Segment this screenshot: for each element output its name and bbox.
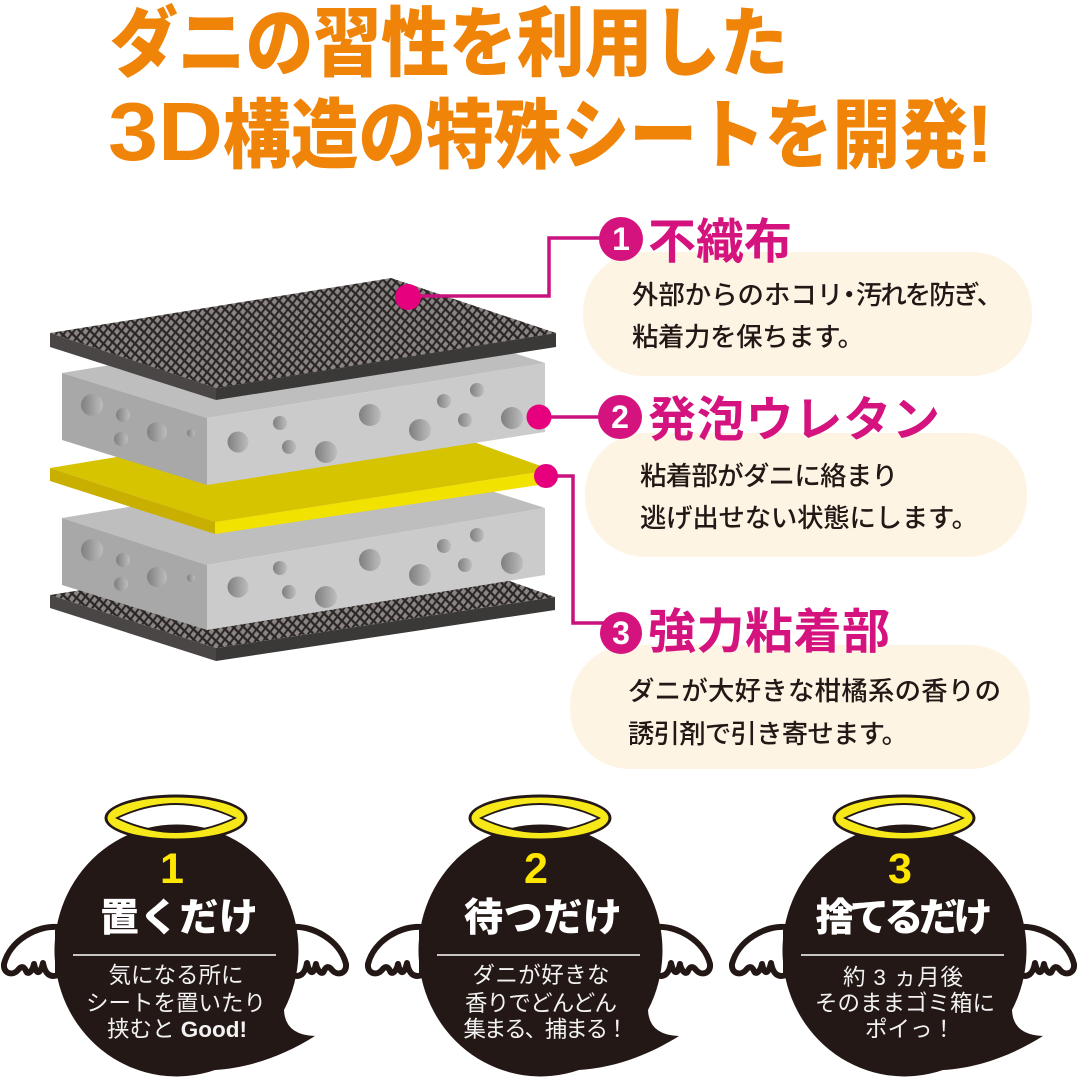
description [73,955,276,1042]
wings [732,927,1074,976]
number badge 3 [600,612,642,654]
title: ダニの習性を利用した [110,2,788,87]
description [437,955,640,1042]
layer: top non-woven sheet [50,278,556,400]
body text 1: 外部からのホコリ [632,280,843,310]
pill 1 [583,252,1032,376]
body text 2: 粘着部がダニに絡まり [640,461,898,491]
pill 3 [570,645,1030,769]
description: 気になる所に [108,963,244,988]
number badge 1 [599,217,643,261]
number: 2 [524,845,548,893]
title: 3D [108,85,223,178]
heading 2: 発泡ウレタン [648,394,940,447]
marker dot 3 [534,464,558,488]
step 1: angel character [4,794,346,1076]
step 2: angel character [368,794,710,1076]
callout 3: strong adhesive [534,464,1030,769]
number badge 2 [598,395,642,439]
number badge 1: 1 [612,221,630,257]
number: 3 [888,845,912,893]
body [782,824,1043,1076]
callout 2: urethane foam [526,394,1027,557]
body text 1: 汚れを防ぎ、 [856,280,1003,310]
body [54,824,315,1076]
body text 3: ダニが大好きな柑橘系の香りの [628,676,1001,706]
body text 3 [628,676,1001,749]
marker dot 2 [526,404,552,430]
description: ダニが好きな [472,963,610,988]
step 3: angel character [732,794,1074,1076]
description: 香りでどんどん [465,991,617,1016]
halo [104,794,247,842]
number badge 2: 2 [611,399,629,435]
layer: lower urethane foam [62,462,545,630]
heading: 待つだけ [464,897,622,940]
body text 2 [640,461,978,533]
description: 集まる、捕まる！ [464,1017,628,1042]
description: そのままゴミ箱に [815,991,995,1016]
number badge 3: 3 [612,615,630,651]
connector line 2 [538,415,610,419]
diagram: layered sheet structure [50,278,556,661]
title [108,2,993,180]
title: ! [966,89,993,180]
heading 1: 不織布 [648,216,792,269]
heading: 置くだけ [100,897,258,940]
description: 約 3 ヵ月後 [843,965,963,990]
layer: bottom non-woven sheet [50,540,555,661]
connector line 1 [408,238,620,296]
body text 1: 粘着力を保ちます。 [632,322,864,352]
connector line 3 [546,476,610,623]
body text 3: 誘引剤で引き寄せます。 [628,719,908,749]
marker dot 1 [395,284,421,310]
description: ポイっ！ [865,1017,955,1042]
layer: upper urethane foam [62,317,545,485]
halo [468,794,612,842]
title: 構造の特殊シートを開発 [223,94,968,179]
description [801,955,1004,1042]
wings [4,927,346,976]
body [418,824,679,1076]
layer: yellow adhesive [50,412,552,534]
wings [368,927,710,976]
pill 2 [585,433,1027,557]
heading: 捨てるだけ [816,897,992,940]
description: シートを置いたり [86,991,266,1016]
callout 1: non-woven fabric [395,216,1032,376]
body text 1: ・ [836,280,862,310]
body text 2: 逃げ出せない状態にします。 [640,503,978,533]
heading 3: 強力粘着部 [648,606,890,659]
halo [832,794,976,842]
number: 1 [160,845,184,893]
description: 挟むと Good! [107,1017,247,1042]
body text 1 [632,280,1003,352]
